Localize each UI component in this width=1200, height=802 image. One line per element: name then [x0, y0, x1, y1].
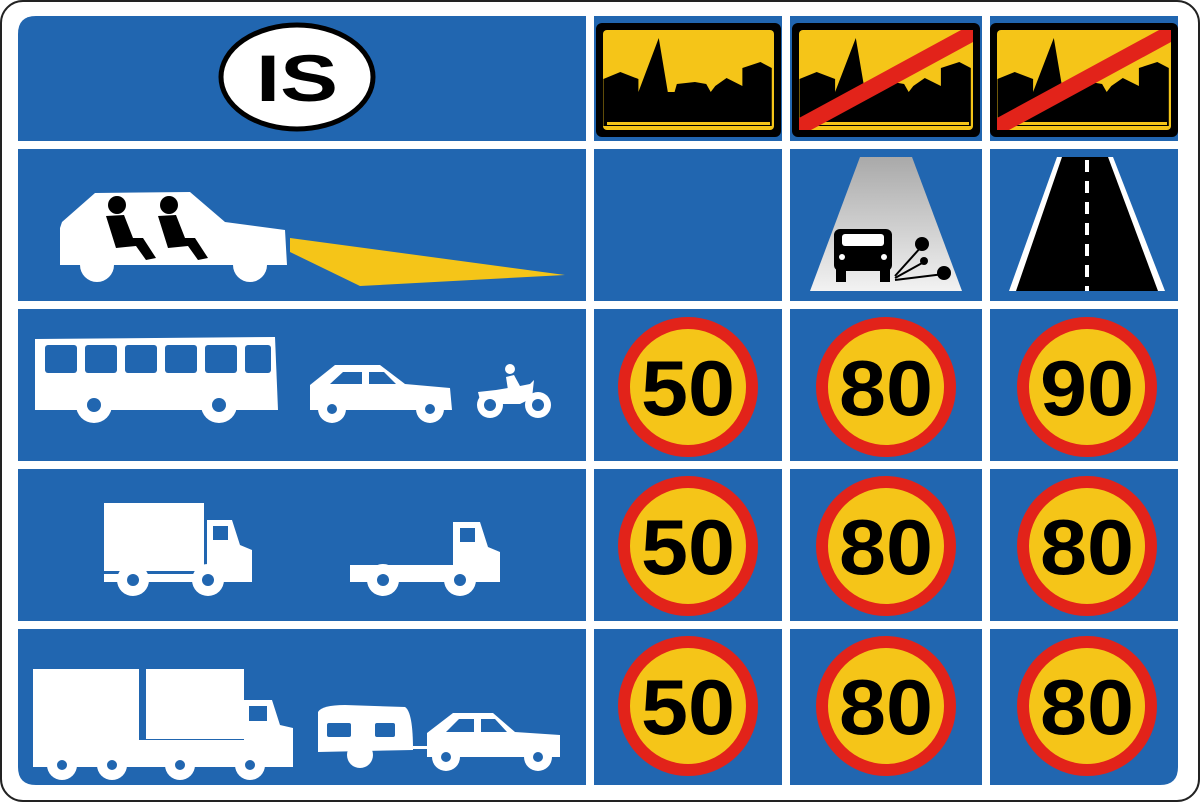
speed sign 80 row 5: 80 — [839, 663, 933, 751]
panel: row 2 column 3 — [990, 149, 1178, 301]
icon: IS country oval — [221, 25, 373, 129]
icon: car — [310, 365, 452, 423]
icon: truck with trailer — [33, 669, 293, 780]
panel: header left — [18, 16, 586, 141]
speed sign 80 row 5 paved — [1023, 642, 1151, 770]
speed sign 80 row 5 paved: 80 — [1040, 663, 1134, 751]
icon: bus — [35, 337, 278, 423]
panel: header column 3 — [990, 16, 1178, 141]
panel: row 4 label — [18, 469, 586, 621]
icon: flatbed truck — [350, 522, 500, 596]
icon: town sign — [596, 23, 781, 137]
icon: end of town sign — [792, 23, 980, 137]
icon: paved road — [1009, 157, 1165, 291]
icon: lorry — [104, 503, 252, 596]
icon: car with seatbelts and headlights — [60, 192, 565, 286]
icon: IS country oval: IS — [256, 41, 338, 115]
speed sign 90 paved row 3 — [1023, 323, 1151, 451]
speed sign 80 row 4: 80 — [839, 503, 933, 591]
speed sign 50 urban row 3 — [624, 323, 752, 451]
panel: row 2 label — [18, 149, 586, 301]
speed sign 50 row 4: 50 — [641, 503, 735, 591]
speed sign 80 gravel row 3 — [822, 323, 950, 451]
icon: car — [427, 713, 560, 771]
speed sign 80 row 4 paved — [1023, 482, 1151, 610]
panel: speed cells — [594, 309, 1178, 785]
speed sign 80 row 4 — [822, 482, 950, 610]
panel: row 2 column 1 (empty) — [594, 149, 782, 301]
speed sign 80 gravel row 3: 80 — [839, 344, 933, 432]
panel: header column 1 — [594, 16, 782, 141]
speed sign 90 paved row 3: 90 — [1040, 344, 1134, 432]
speed sign 50 row 5 — [624, 642, 752, 770]
panel: row 2 column 2 — [790, 149, 982, 301]
icon: end of town sign — [990, 23, 1178, 137]
panel: row 3 label — [18, 309, 586, 461]
speed sign 50 urban row 3: 50 — [641, 344, 735, 432]
speed sign 80 row 4 paved: 80 — [1040, 503, 1134, 591]
speed sign 50 row 4 — [624, 482, 752, 610]
panel: row 5 label — [18, 629, 586, 785]
icon: caravan — [318, 705, 427, 768]
speed sign 80 row 5 — [822, 642, 950, 770]
icon: gravel road — [810, 157, 962, 291]
icon: motorcycle — [477, 364, 551, 418]
panel: header column 2 — [790, 16, 982, 141]
speed sign 50 row 5: 50 — [641, 663, 735, 751]
